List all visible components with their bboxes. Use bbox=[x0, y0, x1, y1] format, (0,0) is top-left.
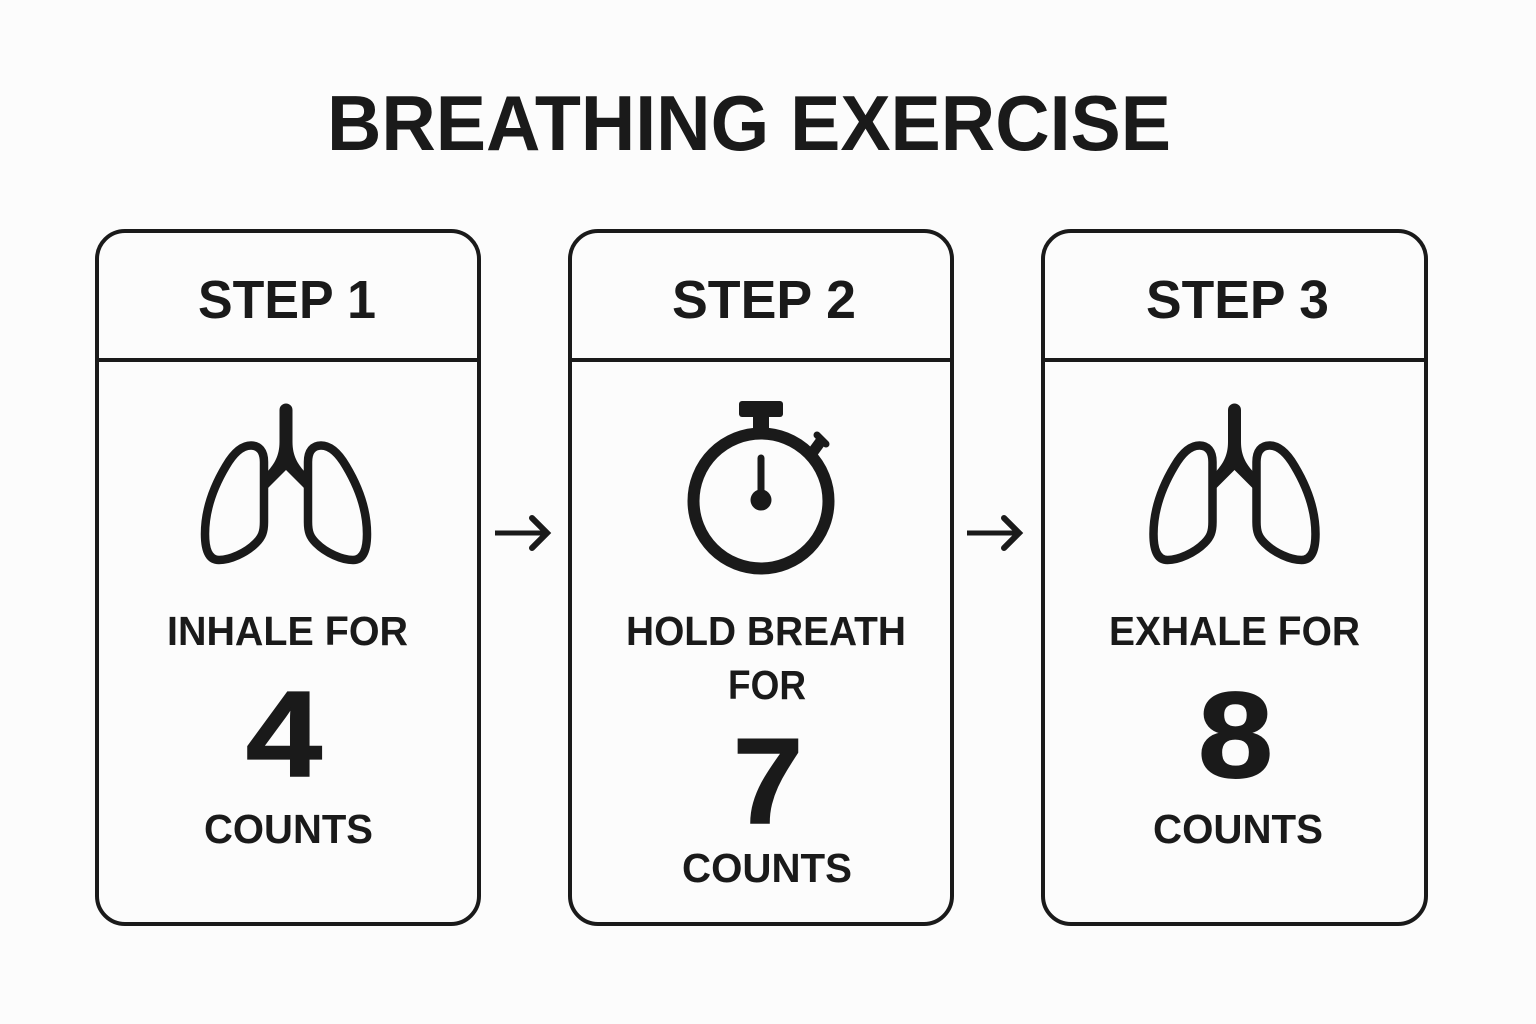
number: 8: 8 bbox=[1198, 667, 1273, 803]
panel: step 1 bbox=[97, 231, 479, 924]
text: hold breath for: HOLD BREATH bbox=[626, 608, 906, 654]
heading: step 3: STEP 3 bbox=[1146, 270, 1329, 330]
arrow: step 1 to step 2 bbox=[495, 518, 547, 548]
text: counts: COUNTS bbox=[682, 845, 852, 891]
text: hold breath for: FOR bbox=[728, 662, 806, 708]
heading: step 1: STEP 1 bbox=[198, 270, 376, 330]
icon: stopwatch bbox=[694, 401, 828, 568]
text: counts: COUNTS bbox=[1153, 806, 1323, 852]
text: inhale for: INHALE FOR bbox=[167, 608, 408, 654]
panel: step 2 bbox=[570, 231, 952, 924]
text: counts: COUNTS bbox=[204, 806, 373, 852]
panel: step 3 bbox=[1043, 231, 1426, 924]
heading: step 2: STEP 2 bbox=[672, 270, 856, 330]
arrow: step 2 to step 3 bbox=[967, 518, 1019, 548]
text: hold breath for bbox=[626, 608, 906, 708]
text: exhale for: EXHALE FOR bbox=[1109, 608, 1360, 654]
number: 4: 4 bbox=[246, 666, 322, 802]
icon: lungs inhale bbox=[205, 404, 367, 560]
icon: lungs exhale bbox=[1154, 404, 1316, 560]
title: BREATHING EXERCISE bbox=[327, 79, 1171, 167]
number: 7: 7 bbox=[733, 713, 803, 849]
